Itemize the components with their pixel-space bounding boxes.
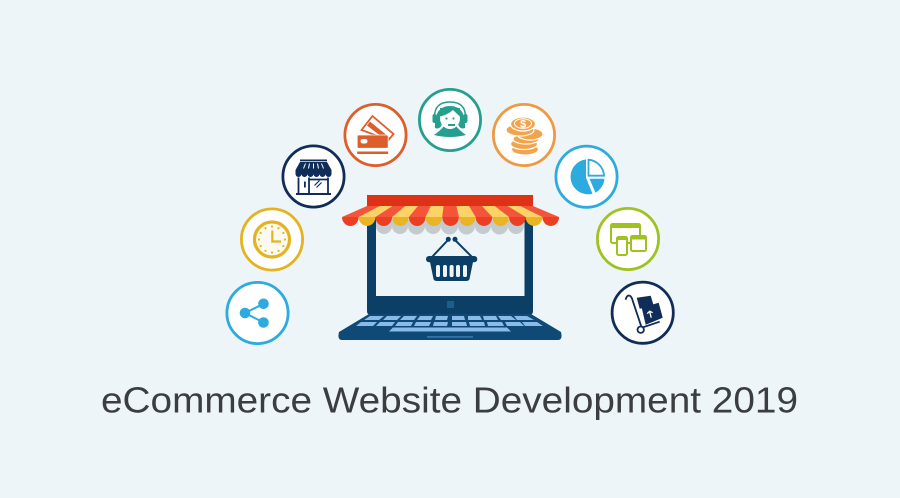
laptop lid and screen	[367, 212, 533, 315]
icon: share	[227, 282, 288, 344]
icon: pie chart	[556, 146, 617, 207]
shopping basket icon	[426, 237, 477, 281]
icon: coin stack	[493, 104, 555, 166]
icon: credit cards	[345, 104, 406, 166]
striped awning	[342, 195, 559, 226]
title: eCommerce Website Development 2019	[101, 380, 798, 420]
icon: delivery hand truck	[612, 282, 673, 343]
laptop keyboard base	[338, 314, 562, 340]
icon: coin stack: $	[520, 118, 526, 130]
icon: responsive devices	[597, 208, 659, 270]
laptop storefront illustration	[338, 195, 562, 340]
icon: clock	[241, 209, 303, 270]
icon: customer support agent	[419, 89, 481, 151]
awning shadow	[376, 220, 524, 234]
icon: storefront	[283, 146, 344, 207]
